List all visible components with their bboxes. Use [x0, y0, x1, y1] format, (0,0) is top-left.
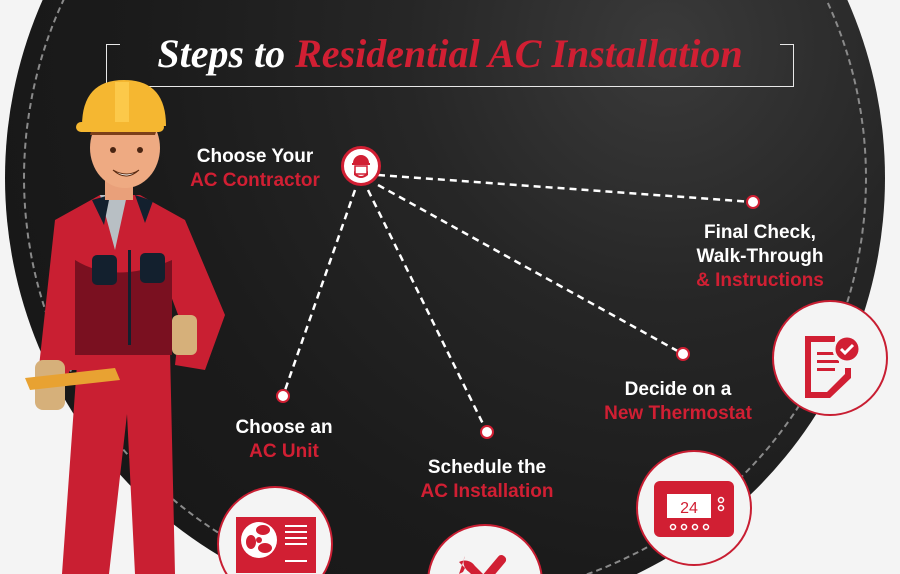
text: final check: Final Check, — [704, 222, 816, 243]
icon: AC unit — [217, 486, 333, 574]
hard hat — [82, 80, 166, 126]
text: choose contractor: AC Contractor — [190, 170, 320, 191]
text: choose contractor: Choose Your — [197, 146, 313, 167]
wrench — [25, 368, 120, 390]
icon: thermostat — [636, 450, 752, 566]
text: choose unit: Choose an — [235, 417, 333, 438]
collar & shirt — [100, 195, 127, 250]
icon: document — [772, 300, 888, 416]
icon: thermostat: 24 — [680, 500, 698, 517]
text: schedule: Schedule the — [428, 457, 546, 478]
icon: contractor — [341, 146, 381, 186]
text: final check — [696, 222, 824, 291]
title: Steps to Residential AC Installation — [157, 31, 743, 76]
gloves — [35, 360, 65, 410]
text: thermostat: Decide on a — [625, 379, 731, 400]
worker illustration — [25, 80, 225, 574]
text: choose contractor — [190, 146, 320, 191]
torso — [37, 195, 225, 390]
neck & head — [105, 170, 133, 200]
text: schedule — [420, 457, 554, 502]
text: choose unit: AC Unit — [249, 441, 319, 462]
text: schedule: AC Installation — [420, 481, 554, 502]
text: thermostat: New Thermostat — [604, 403, 752, 424]
text: choose unit — [235, 417, 333, 462]
text: final check: Walk-Through — [696, 246, 823, 267]
text: final check: & Instructions — [696, 270, 824, 291]
legs — [62, 350, 175, 574]
text: thermostat — [604, 379, 752, 424]
icon: tools — [427, 524, 543, 574]
title — [106, 31, 794, 87]
